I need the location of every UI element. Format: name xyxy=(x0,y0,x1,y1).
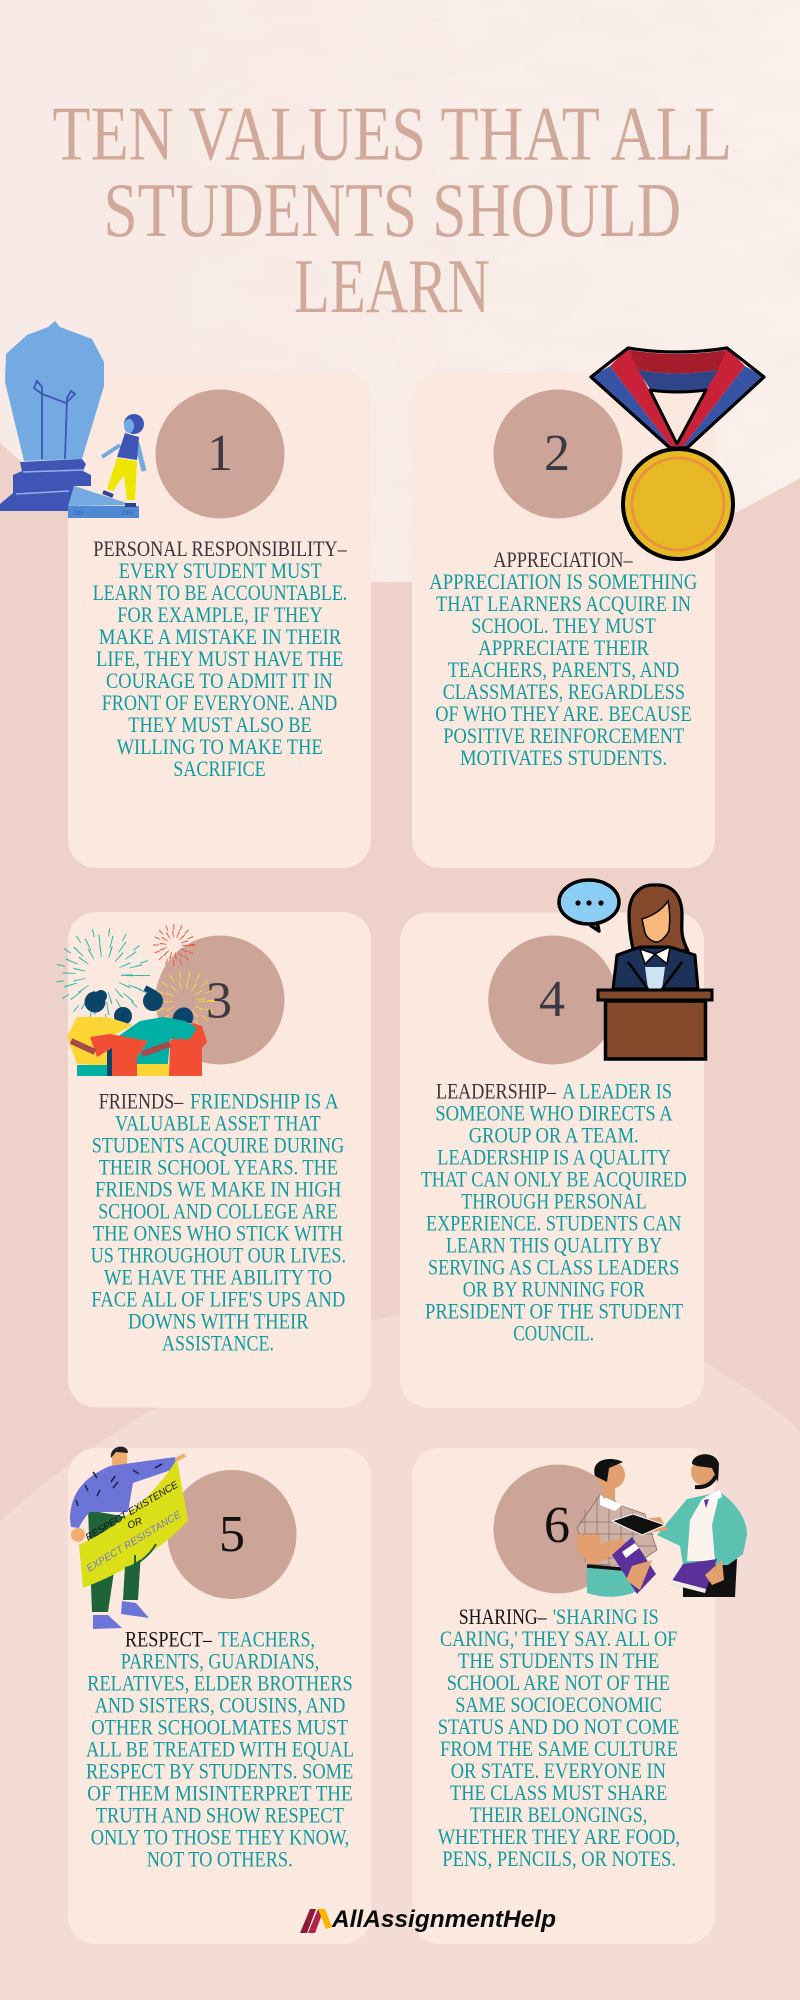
number badge 2: 2 xyxy=(544,425,570,482)
text block 3: FACE ALL OF LIFE'S UPS AND xyxy=(91,1287,345,1312)
icon: friends and fireworks xyxy=(60,927,211,1076)
text block 5: NOT TO OTHERS. xyxy=(147,1846,293,1871)
number 3: 3 xyxy=(206,972,232,1030)
text block 1: EVERY STUDENT MUST xyxy=(119,558,322,583)
text block 3: US THROUGHOUT OUR LIVES. xyxy=(91,1243,346,1268)
text block 6: PENS, PENCILS, OR NOTES. xyxy=(442,1846,676,1871)
number badge 5: 5 xyxy=(219,1506,245,1563)
text block 3 xyxy=(91,1089,346,1356)
number badge 1 xyxy=(156,390,284,518)
text block 4 xyxy=(421,1079,687,1346)
text block 1: LIFE, THEY MUST HAVE THE xyxy=(96,646,343,671)
number badge 1: 1 xyxy=(207,425,233,482)
icon: light bulb and climbing person: OFF xyxy=(122,511,134,517)
text block 5: OTHER SCHOOLMATES MUST xyxy=(91,1714,348,1739)
text block 1 xyxy=(93,536,347,781)
text block 6: THE CLASS MUST SHARE xyxy=(450,1780,667,1805)
number badge 6: 6 xyxy=(544,1497,570,1554)
text block 1: COURAGE TO ADMIT IT IN xyxy=(106,668,333,693)
text block 5: PARENTS, GUARDIANS, xyxy=(121,1648,319,1673)
text block 2: APPRECIATE THEIR xyxy=(478,635,649,660)
text block 4: SERVING AS CLASS LEADERS xyxy=(428,1255,679,1280)
panel: leadership xyxy=(400,912,704,1408)
text block 5: ONLY TO THOSE THEY KNOW, xyxy=(91,1824,349,1849)
text block 5 xyxy=(86,1626,354,1871)
text block 3: WE HAVE THE ABILITY TO xyxy=(104,1265,332,1290)
title: LEARN xyxy=(294,243,490,329)
text block 5: ALL BE TREATED WITH EQUAL xyxy=(86,1736,354,1761)
text block 2: THAT LEARNERS ACQUIRE IN xyxy=(436,591,691,616)
number badge 3 xyxy=(156,936,284,1064)
text block 4: A LEADER IS xyxy=(562,1079,672,1104)
icon: light bulb and climbing person xyxy=(0,321,144,518)
text block 4: THROUGH PERSONAL xyxy=(461,1189,647,1214)
text block 4: THAT CAN ONLY BE ACQUIRED xyxy=(421,1167,687,1192)
title xyxy=(52,90,732,329)
text block 5: RESPECT BY STUDENTS. SOME xyxy=(86,1758,353,1783)
text block 6: STATUS AND DO NOT COME xyxy=(438,1714,679,1739)
text block 3: VALUABLE ASSET THAT xyxy=(115,1111,321,1136)
panel: sharing xyxy=(412,1448,715,1944)
number badge 2 xyxy=(494,390,622,518)
text block 3: ASSISTANCE. xyxy=(162,1331,274,1356)
text block 4: COUNCIL. xyxy=(513,1321,594,1346)
number badge 4 xyxy=(488,936,617,1064)
text block 6: 'SHARING IS xyxy=(553,1604,659,1629)
text block 6: SHARING– xyxy=(459,1604,547,1629)
icon: two men sharing books xyxy=(577,1454,747,1597)
text block 4: GROUP OR A TEAM. xyxy=(469,1123,639,1148)
icon: light bulb and climbing person: ON xyxy=(74,511,83,517)
text block 1: MAKE A MISTAKE IN THEIR xyxy=(99,624,341,649)
text block 1: WILLING TO MAKE THE xyxy=(117,734,323,759)
text block 4: SOMEONE WHO DIRECTS A xyxy=(435,1101,673,1126)
icon: speaker at podium with speech bubble xyxy=(559,880,712,1059)
number badge 6 xyxy=(494,1464,622,1594)
text block 6 xyxy=(438,1604,680,1871)
text block 3: FRIENDS WE MAKE IN HIGH xyxy=(95,1177,341,1202)
text block 3: DOWNS WITH THEIR xyxy=(128,1309,309,1334)
text block 6: SCHOOL ARE NOT OF THE xyxy=(447,1670,670,1695)
text block 2: POSITIVE REINFORCEMENT xyxy=(443,723,684,748)
number badge 5 xyxy=(168,1470,296,1599)
text block 6: OR STATE. EVERYONE IN xyxy=(451,1758,666,1783)
text block 1: FRONT OF EVERYONE. AND xyxy=(102,690,337,715)
text block 2 xyxy=(429,547,697,770)
text block 6: THEIR BELONGINGS, xyxy=(470,1802,647,1827)
text block 2: CLASSMATES, REGARDLESS xyxy=(443,679,685,704)
text block 2: MOTIVATES STUDENTS. xyxy=(460,745,667,770)
text block 3: STUDENTS ACQUIRE DURING xyxy=(92,1133,344,1158)
logo: AllAssignmentHelp: AllAssignmentHelp xyxy=(331,1906,556,1933)
text block 2: TEACHERS, PARENTS, AND xyxy=(448,657,679,682)
text block 2: APPRECIATION IS SOMETHING xyxy=(429,569,697,594)
text block 3: THEIR SCHOOL YEARS. THE xyxy=(99,1155,338,1180)
text block 6: FROM THE SAME CULTURE xyxy=(440,1736,678,1761)
text block 4: OR BY RUNNING FOR xyxy=(463,1277,645,1302)
text block 3: FRIENDSHIP IS A xyxy=(190,1089,339,1114)
text block 5: TRUTH AND SHOW RESPECT xyxy=(96,1802,344,1827)
text block 4: PRESIDENT OF THE STUDENT xyxy=(425,1299,684,1324)
text block 5: OF THEM MISINTERPRET THE xyxy=(87,1780,353,1805)
icon: person holding respect banner: OR xyxy=(126,1516,144,1532)
text block 1: PERSONAL RESPONSIBILITY– xyxy=(93,536,347,561)
text block 1: FOR EXAMPLE, IF THEY xyxy=(117,602,323,627)
text block 1: LEARN TO BE ACCOUNTABLE. xyxy=(93,580,347,605)
text block 4: LEADERSHIP IS A QUALITY xyxy=(437,1145,671,1170)
text block 6: SAME SOCIOECONOMIC xyxy=(455,1692,662,1717)
icon: person holding respect banner: EXPECT RESISTANCE xyxy=(85,1509,183,1575)
text block 5: AND SISTERS, COUSINS, AND xyxy=(95,1692,345,1717)
text block 5: RESPECT– xyxy=(125,1626,213,1651)
text block 4: LEARN THIS QUALITY BY xyxy=(446,1233,662,1258)
panel: personal responsibility xyxy=(68,371,371,868)
text block 6: CARING,' THEY SAY. ALL OF xyxy=(440,1626,677,1651)
text block 5: RELATIVES, ELDER BROTHERS xyxy=(87,1670,353,1695)
text block 3: FRIENDS– xyxy=(99,1089,184,1114)
text block 2: APPRECIATION– xyxy=(493,547,633,572)
text block 4: LEADERSHIP– xyxy=(436,1079,557,1104)
text block 3: SCHOOL AND COLLEGE ARE xyxy=(98,1199,338,1224)
panel: appreciation xyxy=(412,373,715,868)
panel: respect xyxy=(68,1448,371,1944)
text block 1: SACRIFICE xyxy=(173,756,266,781)
text block 2: OF WHO THEY ARE. BECAUSE xyxy=(435,701,692,726)
icon: gold medal xyxy=(591,348,764,559)
text block 4: EXPERIENCE. STUDENTS CAN xyxy=(426,1211,681,1236)
panel: friends xyxy=(68,912,371,1408)
text block 2: SCHOOL. THEY MUST xyxy=(471,613,656,638)
text block 5: TEACHERS, xyxy=(218,1626,315,1651)
number badge 4: 4 xyxy=(539,971,565,1028)
text block 3: THE ONES WHO STICK WITH xyxy=(93,1221,343,1246)
text block 6: WHETHER THEY ARE FOOD, xyxy=(438,1824,680,1849)
icon: person holding respect banner: RESPECT EXISTENCE xyxy=(84,1479,181,1544)
text block 1: THEY MUST ALSO BE xyxy=(128,712,312,737)
icon: person holding respect banner xyxy=(70,1447,188,1629)
text block 6: THE STUDENTS IN THE xyxy=(458,1648,659,1673)
